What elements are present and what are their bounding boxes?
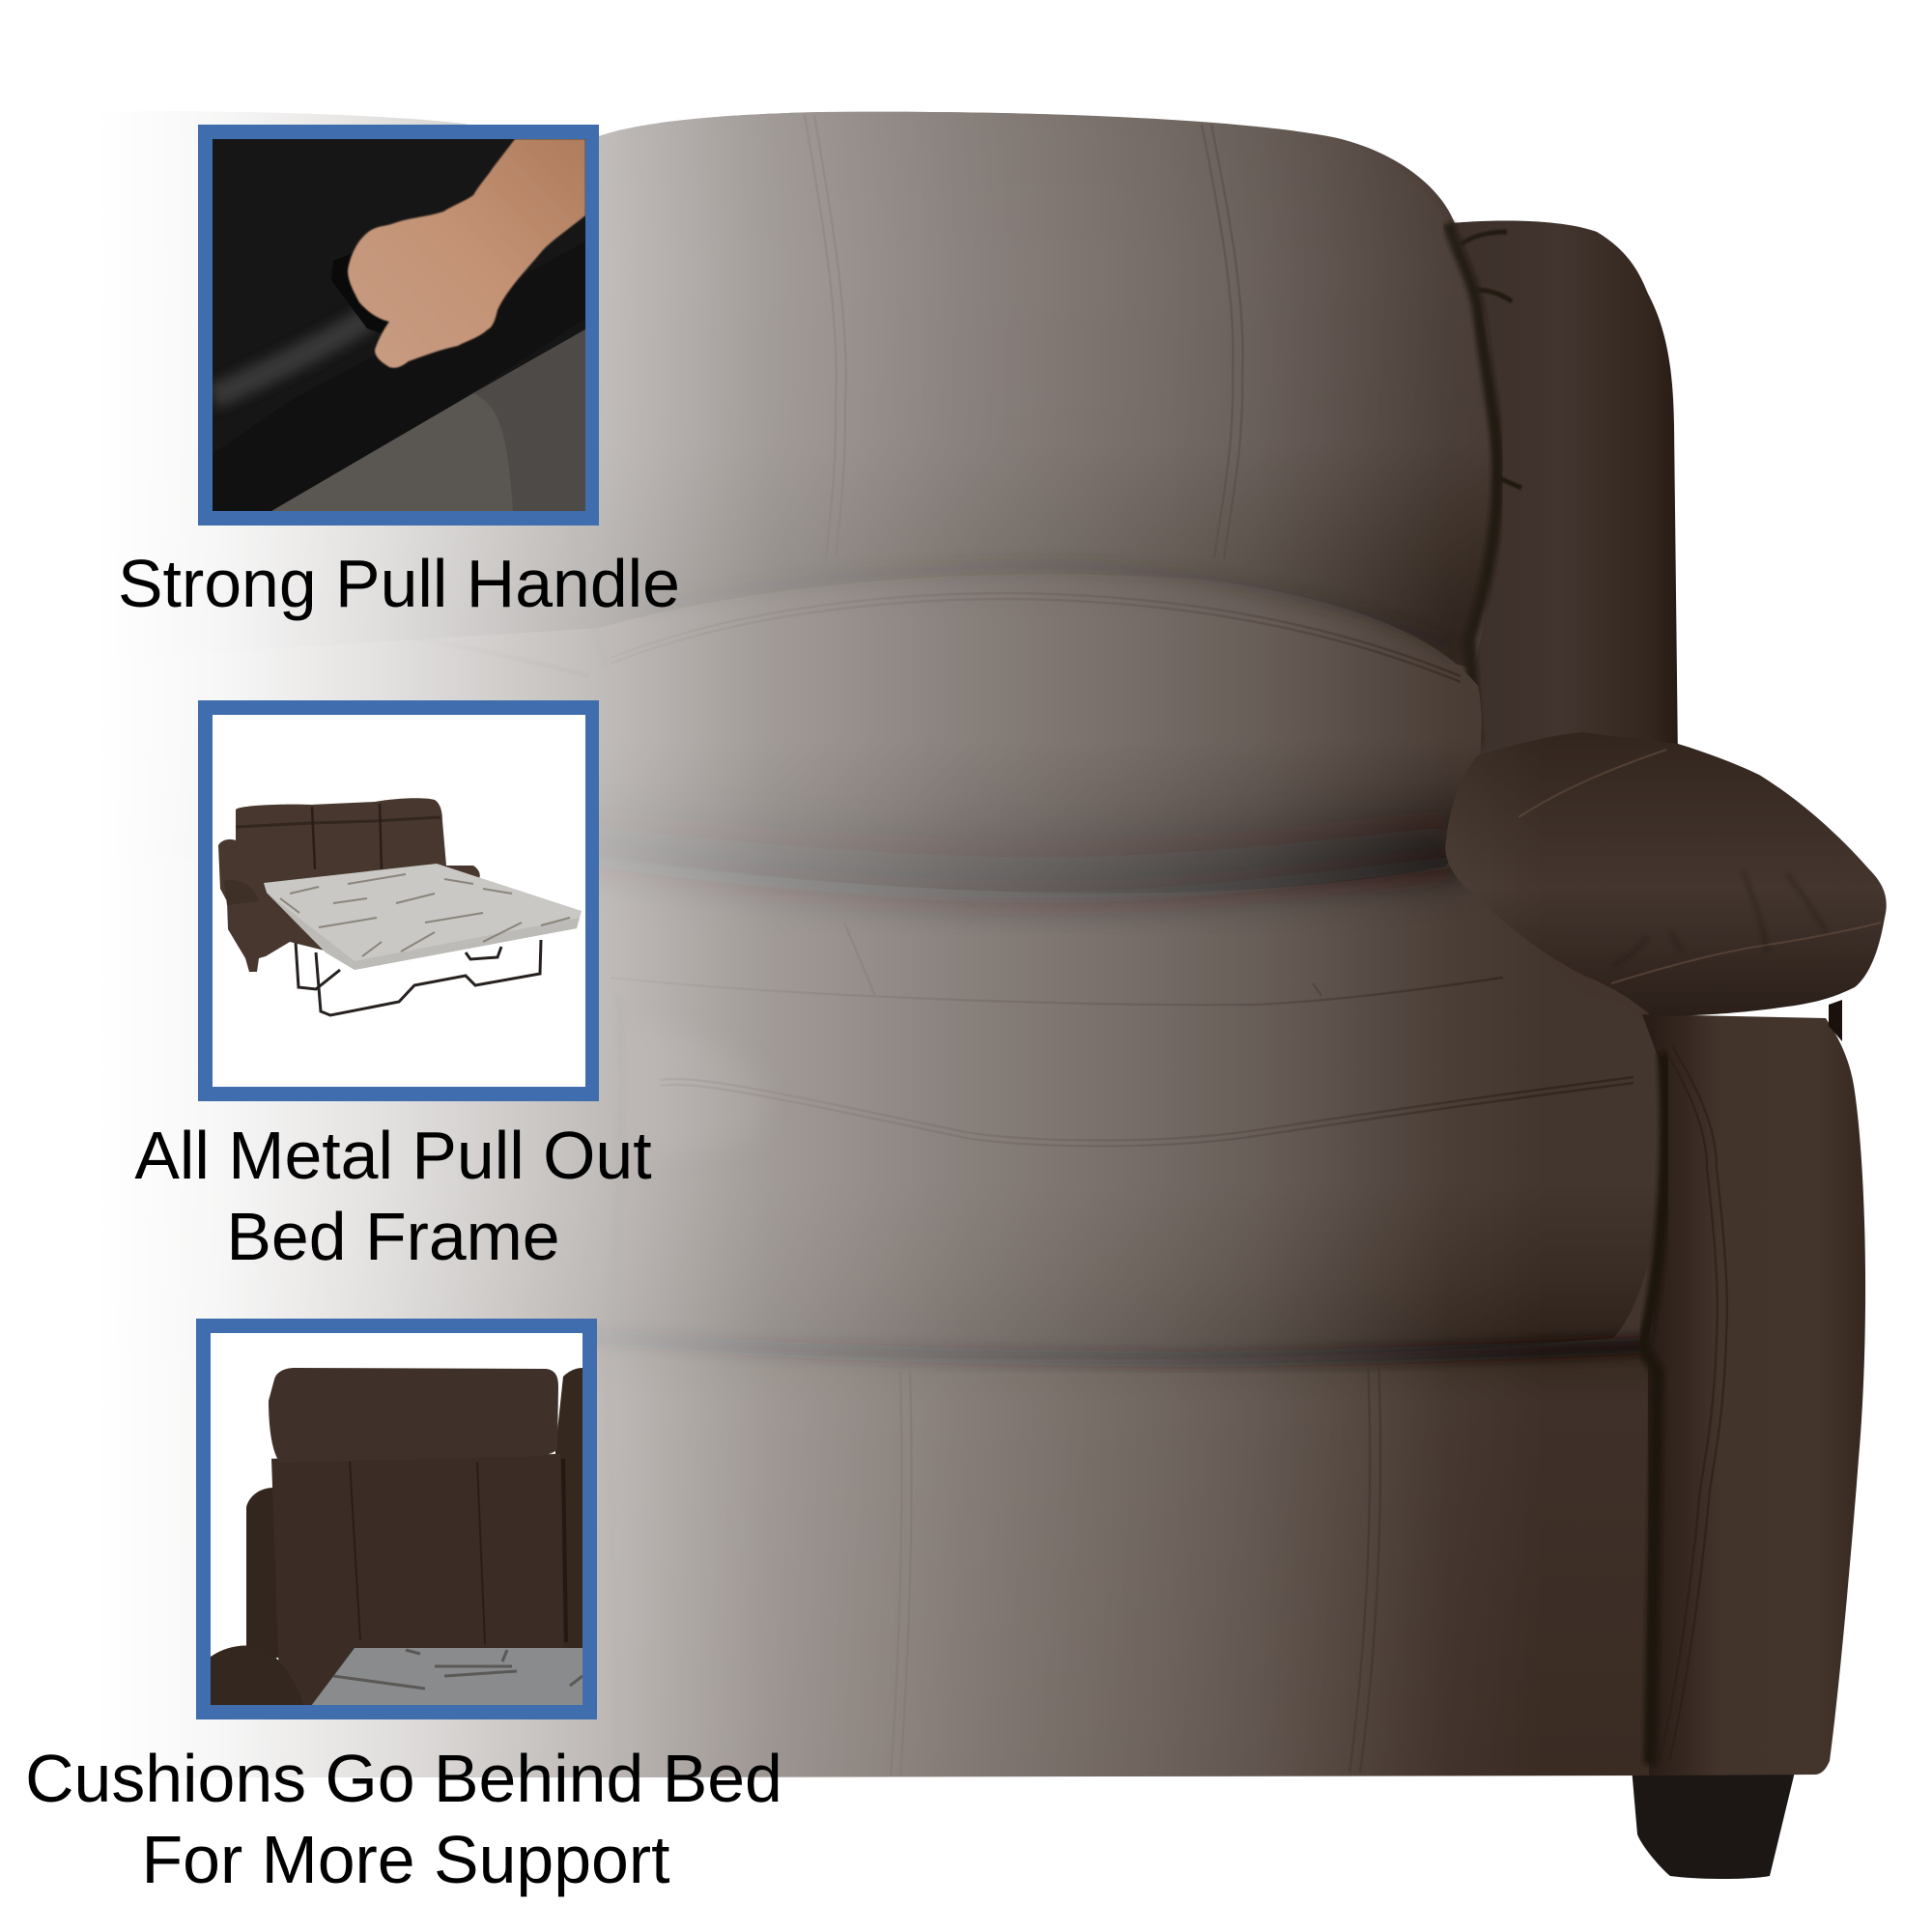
photo frame bbox=[196, 1319, 597, 1719]
photo background bbox=[213, 715, 585, 1087]
dark shadow under lumbar bbox=[386, 852, 1459, 897]
back cushion bbox=[0, 112, 1495, 667]
arm pad wrinkles bbox=[1613, 872, 1826, 966]
caption: all metal pull out bed frame: Bed Frame bbox=[226, 1199, 560, 1274]
crease between back cushion and arm bbox=[1448, 223, 1497, 744]
wrinkles at top of the wing bbox=[1461, 232, 1521, 488]
dark seam under seat bbox=[290, 1331, 1654, 1359]
sofa back and arms bbox=[218, 798, 480, 972]
soft shadow between back cushion and lumbar bbox=[641, 565, 1454, 647]
dark piece under the arm pad bbox=[1829, 1000, 1842, 1041]
mattress leaf print bbox=[280, 874, 570, 956]
caption: cushions go behind bed bbox=[25, 1741, 782, 1897]
arm pad bbox=[1445, 732, 1887, 1016]
panel: cushions go behind bed bbox=[196, 1319, 597, 1719]
seat deck bbox=[0, 850, 1662, 1159]
caption: all metal pull out bed frame: All Metal Pull Out bbox=[134, 1118, 652, 1193]
icon: sofa leg bbox=[1632, 1768, 1796, 1879]
photo: hand pulling the handle bbox=[213, 139, 585, 511]
photo: sofa with pulled out bed bbox=[218, 798, 582, 1015]
crease between neighbouring seat cushions bbox=[572, 526, 622, 1768]
caption: cushions go behind bed: For More Support bbox=[142, 1822, 669, 1897]
arm back wing bbox=[1450, 220, 1678, 763]
photo frame bbox=[198, 125, 599, 526]
right arm front bbox=[1642, 1014, 1865, 1776]
photo frame bbox=[198, 700, 599, 1101]
mattress leaf print bbox=[333, 1650, 582, 1689]
mattress bbox=[264, 864, 582, 970]
seat cushion bbox=[0, 978, 1663, 1359]
gap between seat and arm bbox=[1642, 1053, 1666, 1764]
broad shadow on lower lumbar bbox=[483, 840, 1459, 878]
caption: cushions go behind bed: Cushions Go Behind Bed bbox=[25, 1741, 782, 1816]
sofa silhouette extending to the left bbox=[39, 111, 1671, 1777]
panel: strong pull handle bbox=[198, 125, 599, 526]
neighbouring seat lumbar stitching bbox=[242, 618, 589, 676]
arm pad stitching and wrinkles bbox=[1519, 750, 1881, 983]
photo background bbox=[211, 1333, 582, 1705]
photo: sofa back with cushions behind mattress bbox=[211, 1368, 582, 1710]
front panel below seat bbox=[0, 1345, 1654, 1777]
lumbar cushion bbox=[0, 574, 1482, 894]
highlight on the seat front bbox=[638, 1024, 766, 1159]
bed frame wires bbox=[296, 940, 541, 1015]
caption: strong pull handle: Strong Pull Handle bbox=[118, 546, 680, 621]
caption: all metal pull out bed frame bbox=[134, 1118, 652, 1274]
panel: all metal pull out bed frame bbox=[198, 700, 599, 1101]
leather stitching seams bbox=[611, 115, 1727, 1776]
